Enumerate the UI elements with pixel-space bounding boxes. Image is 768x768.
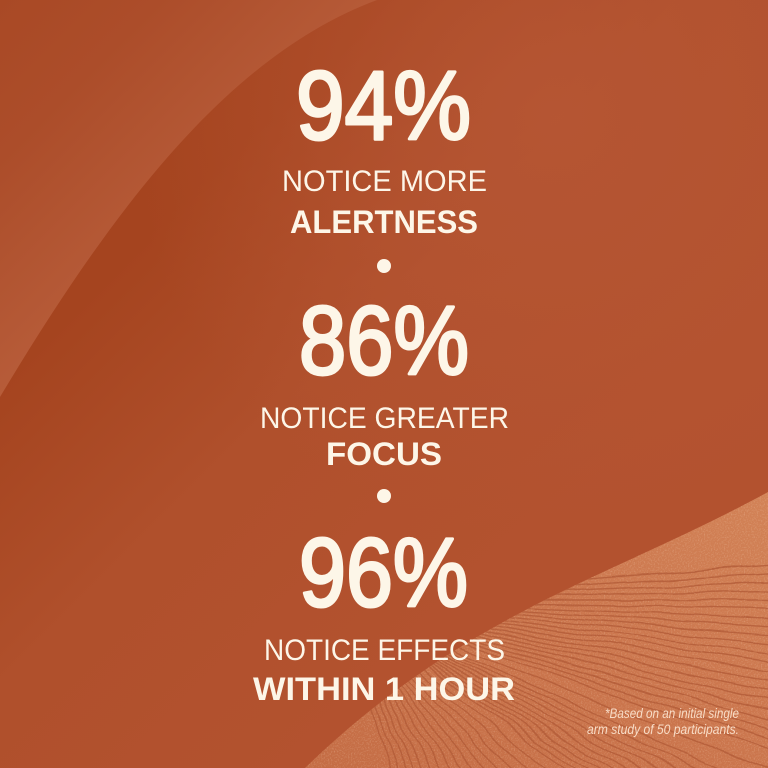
label: alertness: ALERTNESS [290,204,478,240]
stat 1: 94%: 94% [296,51,471,160]
label: focus: FOCUS [326,436,442,472]
label: notice effects: NOTICE EFFECTS [264,634,505,667]
label: within 1 hour: WITHIN 1 HOUR [253,671,515,707]
footnote: *Based on an initial single [605,705,739,721]
footnote: arm study of 50 participants. [587,721,739,737]
stat 2: 86%: 86% [299,286,469,395]
panel: bottom-right textured sand shape [305,492,768,768]
separator dot 2 [377,489,391,503]
label: notice more: NOTICE MORE [282,165,487,198]
panel: top-left curved shape [0,0,377,397]
footnote [587,705,739,737]
label: notice greater: NOTICE GREATER [260,402,509,435]
stat 3: 96%: 96% [299,518,468,627]
separator dot 1 [377,259,391,273]
